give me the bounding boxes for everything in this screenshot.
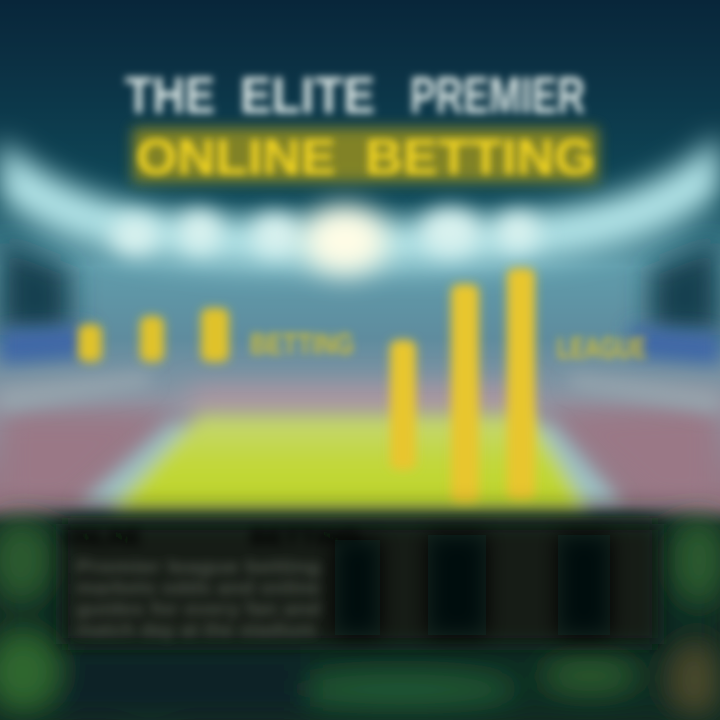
title line 1: PREMIER (410, 67, 585, 125)
stadium side shadows and stands (0, 240, 720, 510)
text block: Premier league betting (76, 557, 321, 577)
panel heading (64, 525, 360, 550)
title line 1: THE (125, 67, 215, 125)
bar 3 (507, 268, 535, 500)
title line 2: BETTING (365, 129, 595, 185)
title line 1 (125, 67, 585, 125)
title line 2: ONLINE (136, 129, 336, 185)
stat icons and labels (78, 308, 647, 365)
foliage band (0, 516, 720, 720)
title line 1: ELITE (240, 67, 375, 125)
icon: stat marker 2 (140, 316, 164, 362)
blue stand stripes (0, 326, 720, 414)
stadium light arc (0, 135, 720, 268)
panel heading: ONLINE (64, 525, 142, 550)
bar 2 (451, 284, 479, 504)
bar chart (390, 268, 535, 504)
title (125, 67, 598, 185)
text block: match day at the stadium (76, 620, 316, 640)
bar 1 (390, 340, 416, 470)
text block (76, 557, 321, 640)
label: right: LEAGUE (557, 332, 647, 365)
label: left: BETTING (250, 328, 354, 361)
dark columns (335, 535, 610, 635)
icon: stat marker 3 (201, 308, 229, 362)
panel heading: BETTING (250, 525, 360, 550)
panel: dark info box (62, 524, 658, 644)
text block: guides for every fan and (76, 599, 321, 619)
title line 2 (133, 128, 598, 185)
pitch (78, 414, 624, 512)
floodlight glows (111, 206, 540, 274)
icon: stat marker 1 (78, 324, 102, 362)
text block: markets odds and online (76, 578, 321, 598)
